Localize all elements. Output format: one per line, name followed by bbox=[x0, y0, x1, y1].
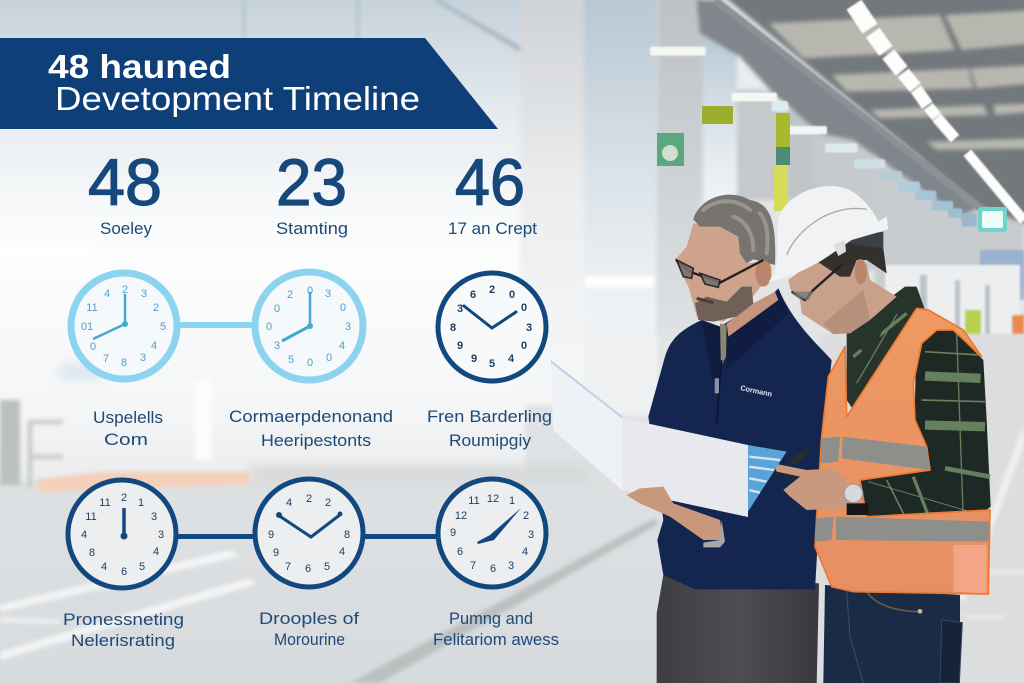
clock 6: 3 bbox=[508, 560, 514, 572]
caption: clock 2: Cormaerpdenonand bbox=[229, 408, 393, 426]
caption: clock 2: Heeripestonts bbox=[261, 432, 371, 450]
clock 2: 3 bbox=[325, 288, 331, 300]
worker: wristwatch bbox=[844, 484, 868, 515]
caption: clock 3: Fren Barderling bbox=[427, 408, 552, 426]
clock 6: 11 bbox=[468, 495, 480, 507]
clock 5: 5 bbox=[324, 561, 330, 573]
clock 3: 9 bbox=[471, 353, 477, 365]
clock 3: 0 bbox=[521, 302, 527, 314]
man: navy jacket bbox=[648, 288, 832, 589]
man: wristwatch bbox=[703, 520, 725, 547]
clock 6: 2 bbox=[523, 510, 529, 522]
clock 4: 11 bbox=[99, 497, 111, 509]
clock 6: 3 bbox=[528, 529, 534, 541]
clock 1: 3 bbox=[140, 352, 146, 364]
clock 2: 0 bbox=[266, 321, 272, 333]
clock 3: 4 bbox=[508, 353, 515, 365]
clock 3: 2 bbox=[489, 284, 495, 296]
clock 2: 3 bbox=[274, 340, 280, 352]
heading line two: Devetopment Timeline bbox=[55, 80, 420, 117]
connector: bottom row bbox=[176, 534, 436, 539]
clock 5: 2 bbox=[306, 493, 312, 505]
clock 4: 1 bbox=[138, 497, 144, 509]
teal sign bbox=[978, 207, 1007, 232]
caption: clock 1 bbox=[93, 409, 163, 449]
clock 6: 7 bbox=[470, 560, 476, 572]
far wall racks bbox=[820, 250, 1024, 683]
clock 1: 01 bbox=[81, 321, 93, 333]
ceiling bbox=[650, 0, 1024, 227]
clock 1: 4 bbox=[104, 288, 110, 300]
clock 6: 6 bbox=[457, 546, 463, 558]
clock 4: 5 bbox=[139, 561, 145, 573]
caption: clock 2 bbox=[229, 408, 393, 450]
clock 2: 0 bbox=[326, 352, 332, 364]
clock 3: 6 bbox=[470, 289, 476, 301]
yellow wall strip bbox=[774, 113, 790, 211]
caption: clock 5: Morourine bbox=[274, 631, 345, 649]
clock 4: 2 bbox=[121, 492, 127, 504]
stat: 23: Stamting bbox=[276, 220, 348, 238]
people group photo illustration bbox=[551, 186, 991, 683]
clock 6: 9 bbox=[450, 527, 456, 539]
man: hand bbox=[627, 487, 723, 540]
heading line one: 48 hauned bbox=[48, 48, 231, 85]
jacket logo: Cormann bbox=[740, 383, 773, 399]
clock 4: 8 bbox=[89, 547, 95, 559]
clock 3: 5 bbox=[489, 358, 495, 370]
clock 2: 3 bbox=[345, 321, 351, 333]
worker: orange safety vest bbox=[815, 308, 990, 594]
stat: 23: 23 bbox=[276, 145, 347, 219]
caption: clock 5: Drooples of bbox=[259, 610, 359, 628]
connector: top row bbox=[176, 322, 254, 328]
clock 2: 0 bbox=[307, 285, 313, 297]
clock 6 bbox=[438, 479, 546, 587]
title banner bbox=[0, 38, 498, 129]
clock 1: 11 bbox=[86, 302, 98, 314]
clock 5: 6 bbox=[305, 563, 311, 575]
clock 5: 8 bbox=[344, 529, 350, 541]
clock 5 bbox=[255, 479, 363, 587]
olive wall sign bbox=[702, 106, 733, 124]
clock 5: 9 bbox=[268, 529, 274, 541]
clock 4: 4 bbox=[153, 546, 159, 558]
clock 6: 12 bbox=[455, 510, 467, 522]
clock 1: 7 bbox=[103, 353, 109, 365]
clock 3: 0 bbox=[521, 340, 527, 352]
clock 6: 6 bbox=[490, 563, 496, 575]
caption: clock 1: Uspelells bbox=[93, 409, 163, 427]
clock 4 bbox=[68, 480, 176, 588]
caption: clock 3 bbox=[427, 408, 552, 450]
clock 3 bbox=[438, 273, 546, 381]
clock 2 bbox=[255, 272, 363, 380]
worker: hand with phone bbox=[772, 448, 847, 510]
caption: clock 4: Nelerisrating bbox=[71, 632, 175, 650]
clock 3: 3 bbox=[526, 322, 532, 334]
green exit sign bbox=[657, 133, 684, 166]
clock 1: 2 bbox=[153, 302, 159, 314]
clock 3: 9 bbox=[457, 340, 463, 352]
clock 1: 8 bbox=[121, 357, 127, 369]
clock 4: 6 bbox=[121, 566, 127, 578]
clock 5: 4 bbox=[286, 497, 292, 509]
caption: clock 6 bbox=[433, 610, 559, 649]
clock 5: 4 bbox=[339, 546, 345, 558]
stat: 48: Soeley bbox=[100, 220, 153, 238]
clock 4: 11 bbox=[85, 511, 97, 523]
clock 4: 4 bbox=[81, 529, 87, 541]
caption: clock 6: Pumng and bbox=[449, 610, 533, 628]
clock 6: 1 bbox=[509, 495, 515, 507]
caption: clock 5 bbox=[259, 610, 359, 649]
worker: plaid shirt bbox=[847, 287, 991, 523]
clock 3: 3 bbox=[457, 303, 463, 315]
clock 5: 2 bbox=[325, 497, 331, 509]
stat: 46: 17 an Crept bbox=[448, 220, 537, 238]
laptop lid bbox=[551, 360, 787, 517]
clock 1: 4 bbox=[151, 340, 157, 352]
clock 1: 0 bbox=[90, 341, 96, 353]
clock 2: 0 bbox=[307, 357, 313, 369]
worker: head and helmet bbox=[768, 186, 910, 360]
clock 2: 5 bbox=[288, 354, 294, 366]
caption: clock 3: Roumipgiy bbox=[449, 432, 532, 450]
clock 2: 0 bbox=[340, 302, 346, 314]
clock 2: 2 bbox=[287, 289, 293, 301]
clock 4: 4 bbox=[101, 561, 107, 573]
stat: 46 bbox=[448, 145, 537, 238]
clock 1: 2 bbox=[122, 284, 128, 296]
clock 4: 3 bbox=[158, 529, 164, 541]
clock 1 bbox=[71, 273, 177, 379]
clock 4: 3 bbox=[151, 511, 157, 523]
clock 2: 4 bbox=[339, 340, 345, 352]
stat: 48: 48 bbox=[88, 145, 162, 219]
clock 2: 0 bbox=[274, 303, 280, 315]
caption: clock 1: Com bbox=[104, 431, 148, 449]
caption: clock 4 bbox=[63, 611, 184, 650]
worker: jeans bbox=[823, 585, 962, 683]
caption: clock 4: Pronessneting bbox=[63, 611, 184, 629]
clock 1: 3 bbox=[141, 288, 147, 300]
caption: clock 6: Felitariom awess bbox=[433, 631, 559, 649]
clock 5: 9 bbox=[273, 547, 279, 559]
stat: 46: 46 bbox=[455, 145, 525, 219]
clock 5: 7 bbox=[285, 561, 291, 573]
man: head bbox=[675, 195, 778, 337]
clock 6: 4 bbox=[522, 546, 528, 558]
clock 3: 0 bbox=[509, 289, 515, 301]
clock 1: 5 bbox=[160, 321, 166, 333]
man: trousers bbox=[657, 575, 819, 683]
clock 3: 8 bbox=[450, 322, 456, 334]
clock 6: 12 bbox=[487, 493, 499, 505]
floor markings bbox=[0, 400, 1024, 683]
